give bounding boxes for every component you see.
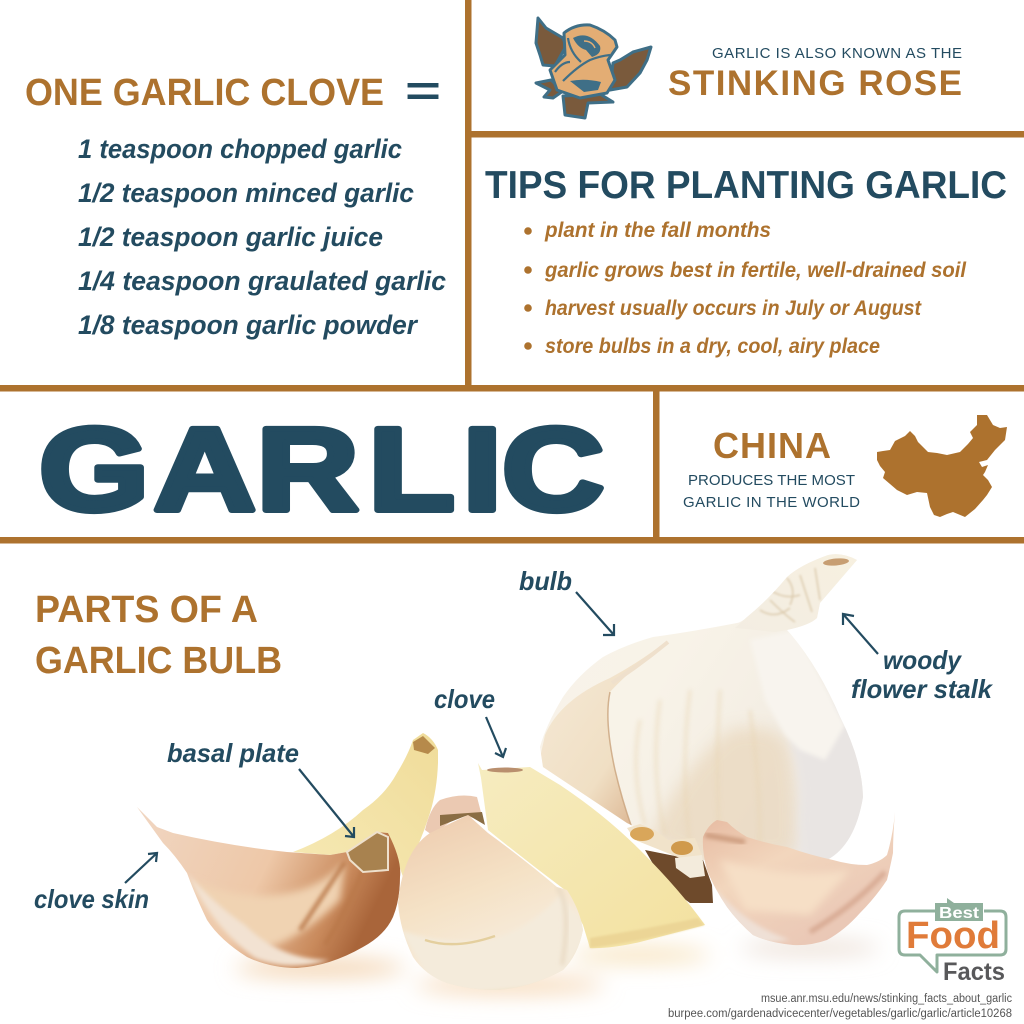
list of equivalents: 1/2 teaspoon garlic juice — [78, 222, 383, 252]
source links: burpee.com/gardenadvicecenter/vegetables/garlic/garlic/article10268 — [668, 1008, 1012, 1020]
equals sign: = — [405, 67, 441, 114]
panel: planting tips — [485, 164, 1007, 358]
skin clove center — [398, 812, 583, 981]
label: basal plate — [167, 738, 354, 837]
logo: best food facts: Best — [939, 905, 980, 922]
panel: parts of a garlic bulb — [34, 554, 994, 995]
icon: map of china — [877, 415, 1007, 517]
tips list: plant in the fall months — [544, 219, 771, 242]
caption: produces the most garlic: GARLIC IN THE WORLD — [683, 494, 860, 511]
label: clove — [434, 684, 506, 757]
tips list: store bulbs in a dry, cool, airy place — [545, 335, 880, 358]
caption: produces the most garlic — [683, 472, 860, 511]
label: woody flower stalk — [843, 614, 994, 704]
heading: parts of a garlic bulb: GARLIC BULB — [35, 640, 282, 682]
heading: stinking rose: STINKING ROSE — [668, 64, 962, 103]
panel: one garlic clove equivalents — [25, 67, 446, 340]
label: bulb: bulb — [519, 566, 572, 596]
list of equivalents: 1 teaspoon chopped garlic — [78, 134, 402, 164]
label: bulb — [519, 566, 614, 635]
title: garlic: GARLIC — [39, 403, 604, 535]
heading: parts of a garlic bulb: PARTS OF A — [35, 589, 258, 631]
arrow: clove skin — [125, 853, 157, 883]
photo: garlic bulb and cloves — [137, 554, 895, 995]
tips list: harvest usually occurs in July or August — [545, 297, 922, 320]
panel: china — [683, 415, 1007, 517]
peeled back clove — [293, 733, 438, 877]
heading: one garlic clove equals: ONE GARLIC CLOVE — [25, 72, 384, 114]
arrow: flower stalk — [843, 614, 878, 654]
tips list — [524, 219, 967, 358]
logo: best food facts: Facts — [943, 958, 1005, 986]
whole bulb — [538, 554, 870, 865]
caption: also known as: GARLIC IS ALSO KNOWN AS THE — [712, 45, 962, 62]
panel: stinking rose — [536, 18, 962, 118]
list of equivalents — [78, 134, 446, 340]
logo: best food facts — [899, 898, 1006, 986]
list of equivalents: 1/4 teaspoon graulated garlic — [78, 266, 446, 296]
skin clove right — [703, 812, 895, 945]
skin clove left — [137, 807, 400, 968]
ground shadows — [235, 941, 880, 994]
label: woody flower stalk: flower stalk — [851, 674, 994, 704]
label: clove skin — [34, 853, 157, 914]
heading: parts of a garlic bulb — [35, 589, 282, 682]
back skin clove — [425, 796, 483, 835]
label: clove skin: clove skin — [34, 884, 149, 914]
bulb base — [627, 824, 713, 903]
rose lower blot — [570, 80, 601, 92]
tips list: garlic grows best in fertile, well-drained soil — [544, 259, 967, 282]
label: clove: clove — [434, 684, 495, 714]
arrow: basal plate — [299, 769, 354, 837]
icon: rose — [536, 18, 651, 118]
list of equivalents: 1/8 teaspoon garlic powder — [78, 310, 418, 340]
list of equivalents: 1/2 teaspoon minced garlic — [78, 178, 414, 208]
rose petal shading — [573, 35, 600, 57]
caption: produces the most garlic: PRODUCES THE MOST — [688, 472, 855, 489]
heading: tips for planting garlic: TIPS FOR PLANTING GARLIC — [485, 164, 1007, 207]
peeled large clove — [478, 763, 705, 948]
arrow: clove — [486, 717, 506, 757]
source links: msue.anr.msu.edu/news/stinking_facts_about_garlic — [761, 993, 1012, 1005]
label: woody flower stalk: woody — [883, 645, 962, 675]
source links — [668, 993, 1012, 1020]
panel dividers — [0, 0, 1024, 544]
logo: best food facts: Food — [906, 915, 1000, 957]
heading: china: CHINA — [713, 425, 831, 466]
arrow: bulb — [576, 592, 614, 635]
label: basal plate: basal plate — [167, 738, 299, 768]
